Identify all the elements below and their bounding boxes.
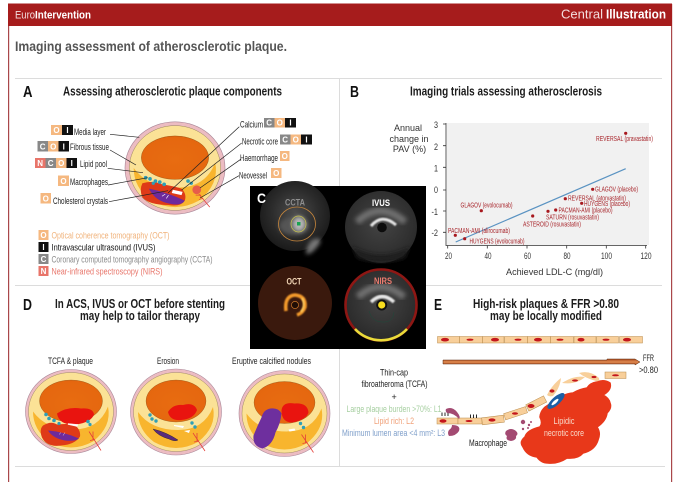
label: media layer: O	[53, 126, 60, 135]
image: NIRS: NIRS	[374, 276, 392, 287]
legend: imaging modalities: I	[42, 243, 45, 252]
data labels: PACMAN-AMI (placebo)	[558, 208, 612, 214]
label: calcium: Calcium	[240, 120, 263, 130]
artery: erosion: Erosion	[157, 356, 179, 366]
panel E heading	[473, 297, 619, 323]
label: fibrous tissue	[38, 141, 109, 152]
label: haemorrhage: Haemorrhage	[240, 153, 278, 163]
image: IVUS	[345, 191, 417, 263]
leader lines	[108, 127, 242, 202]
label: necrotic core: O	[293, 136, 299, 144]
artery: eruptive calcified nodules: Eruptive calcified nodules	[232, 356, 311, 366]
label: cholesterol crystals: Cholesterol crystals	[53, 196, 108, 206]
panel A heading: Assessing atherosclerotic plaque components	[63, 84, 282, 98]
label: calcium	[240, 118, 296, 130]
FFR label: >0.80	[639, 365, 658, 376]
panel D heading: In ACS, IVUS or OCT before stenting	[55, 297, 225, 311]
y tick labels: 2	[434, 142, 438, 152]
y axis title	[389, 123, 429, 154]
blue fibrous cap	[545, 391, 567, 411]
necrotic core: necrotic core	[544, 428, 584, 438]
macrophages	[446, 408, 532, 441]
panel C: imaging modality images	[250, 181, 426, 349]
artery: TCFA and plaque	[26, 356, 116, 454]
y tick labels: 1	[434, 164, 438, 174]
label: macrophages: Macrophages	[70, 177, 108, 187]
label: lipid pool: O	[58, 159, 64, 168]
label: macrophages: O	[60, 177, 67, 186]
label: calcium: I	[289, 119, 292, 128]
y axis title: PAV (%)	[393, 144, 426, 154]
data labels: ASTEROID (rosuvastatin)	[523, 222, 581, 228]
legend: imaging modalities: Intravascular ultrasound (IVUS)	[52, 242, 156, 252]
y axis title: change in	[389, 134, 429, 144]
panel D letter: D	[23, 297, 32, 314]
image: OCT: OCT	[286, 276, 302, 288]
label: necrotic core: I	[305, 136, 308, 144]
label: lipid pool: C	[48, 159, 54, 168]
y tick labels	[432, 120, 438, 238]
panel C letter: C	[257, 190, 266, 206]
label: necrotic core: Necrotic core	[242, 136, 278, 146]
y tick labels: 0	[434, 185, 438, 195]
TCFA criteria: fibroatheroma (TCFA)	[362, 379, 428, 389]
TCFA criteria: Lipid rich: L2	[374, 416, 414, 426]
label: media layer: Media layer	[74, 127, 106, 137]
panel A letter: A	[23, 84, 33, 101]
legend: imaging modalities: N	[41, 267, 47, 276]
trend line	[456, 169, 626, 242]
data labels: HUYGENS (placebo)	[584, 201, 630, 208]
label: lipid pool: I	[71, 159, 73, 168]
data labels: GLAGOV (evolocumab)	[460, 202, 512, 210]
label: cholesterol crystals	[40, 193, 108, 206]
endothelial cell row	[438, 336, 642, 343]
scatter chart	[432, 120, 653, 261]
panel D heading: may help to tailor therapy	[80, 309, 200, 323]
x tick labels: 60	[524, 251, 531, 261]
legend: imaging modalities: Near-infrared spectroscopy (NIRS)	[52, 266, 162, 276]
label: media layer	[51, 125, 106, 137]
TCFA criteria: Thin-cap	[380, 368, 408, 378]
label: neovessel: Neovessel	[239, 170, 267, 180]
lumen-side markers	[442, 412, 476, 418]
panel B: imaging trials	[350, 84, 653, 278]
panel E letter: E	[434, 297, 442, 314]
label: lipid pool: Lipid pool	[80, 159, 107, 169]
arrow: FFR gradient	[443, 359, 640, 365]
label: necrotic core: C	[282, 136, 288, 144]
label: calcium: C	[266, 119, 272, 128]
label: lipid pool	[35, 158, 107, 169]
x tick labels: 120	[640, 251, 652, 261]
FFR label: FFR	[643, 353, 654, 364]
panel E heading: may be locally modified	[490, 309, 602, 323]
panel E: high-risk plaques and FFR	[342, 297, 658, 463]
header bar	[8, 4, 672, 26]
label: necrotic core	[242, 134, 312, 146]
data labels: SATURN (rosuvastatin)	[546, 214, 599, 222]
necrotic core: Lipidic	[554, 416, 575, 426]
header bar: Illustration	[606, 6, 666, 22]
artery: erosion	[130, 356, 222, 455]
panel D heading	[55, 297, 225, 323]
data points	[454, 132, 627, 240]
TCFA criteria: Minimum lumen area <4 mm²: L3	[342, 428, 445, 438]
macrophage label: Macrophage	[469, 438, 507, 448]
header bar: Euro	[15, 10, 35, 22]
TCFA criteria	[342, 368, 445, 438]
image: CCTA: CCTA	[285, 198, 305, 208]
header bar: Central	[561, 6, 603, 22]
label: neovessel: O	[273, 169, 279, 178]
image: CCTA	[260, 181, 330, 254]
artery cross-section diagram	[125, 122, 225, 214]
label: fibrous tissue: I	[63, 142, 65, 152]
panel A: plaque components	[23, 84, 312, 276]
y tick labels: -1	[432, 207, 438, 217]
legend: imaging modalities: C	[41, 255, 47, 264]
data labels	[448, 136, 653, 246]
y axis title: Annual	[394, 123, 422, 133]
data labels: REVERSAL (atorvastatin)	[568, 196, 626, 202]
label: media layer: I	[66, 126, 69, 135]
data labels: GLAGOV (placebo)	[595, 186, 638, 194]
necrotic core	[521, 381, 611, 463]
legend: imaging modalities	[38, 230, 212, 276]
y tick labels: -2	[432, 228, 438, 238]
x tick labels: 20	[445, 251, 452, 261]
x tick labels	[445, 251, 652, 261]
vessel wall cells	[437, 372, 626, 425]
y tick labels: 3	[434, 120, 438, 130]
data labels: REVERSAL (pravastatin)	[596, 136, 653, 143]
TCFA criteria: Large plaque burden >70%: L1	[346, 404, 442, 414]
legend: imaging modalities: Optical coherence tomography (OCT)	[52, 230, 170, 240]
label: lipid pool: N	[37, 159, 43, 168]
label: fibrous tissue: C	[40, 142, 46, 152]
FFR label	[639, 353, 658, 376]
label: fibrous tissue: Fibrous tissue	[70, 142, 109, 152]
data labels: PACMAN-AMI (alirocumab)	[448, 228, 510, 235]
x tick labels: 40	[484, 251, 492, 261]
TCFA criteria: +	[392, 392, 397, 402]
label: haemorrhage: O	[282, 152, 288, 161]
image: OCT	[258, 266, 332, 340]
panel E heading: High-risk plaques & FFR >0.80	[473, 297, 619, 311]
title: Imaging assessment of atherosclerotic plaque.	[15, 38, 287, 54]
panel B heading: Imaging trials assessing atherosclerosis	[410, 84, 602, 98]
x axis title: Achieved LDL-C (mg/dl)	[506, 267, 603, 278]
label: calcium: O	[277, 119, 283, 128]
label: macrophages	[58, 176, 108, 187]
artery: TCFA and plaque: TCFA & plaque	[48, 356, 93, 366]
data labels: HUYGENS (evolocumab)	[470, 238, 524, 246]
legend: imaging modalities: Coronary computed tomography angiography (CCTA)	[52, 254, 212, 264]
x tick labels: 80	[564, 251, 570, 261]
panel D: ACS imaging	[23, 297, 330, 456]
label: cholesterol crystals: O	[43, 194, 49, 204]
legend: imaging modalities: O	[40, 231, 47, 240]
panel B letter: B	[350, 84, 359, 101]
artery: eruptive calcified nodules	[232, 356, 330, 456]
image: IVUS: IVUS	[372, 198, 390, 209]
x tick labels: 100	[601, 251, 612, 261]
image: NIRS	[346, 270, 416, 340]
label: fibrous tissue: O	[50, 142, 56, 152]
header bar: Intervention	[35, 10, 91, 22]
